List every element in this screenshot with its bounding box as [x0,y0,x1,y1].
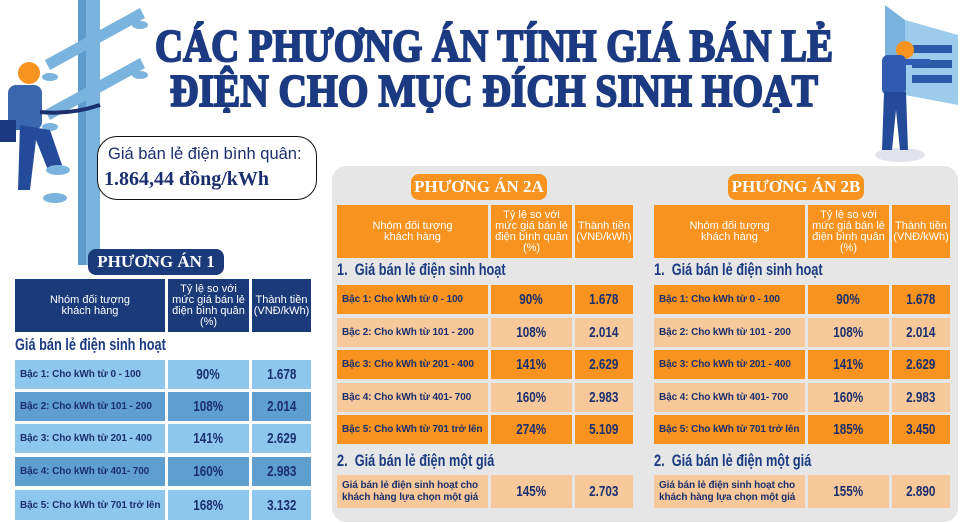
table header [15,279,311,332]
table rows: Bậc 1: Cho kWh từ 0 - 100 [659,294,780,305]
heading: phuong an 2B [728,174,864,200]
table rows: 141% [194,430,223,447]
table header: khách hàng [384,230,441,242]
section label: Giá bán lẻ điện sinh hoạt [15,335,166,354]
table rows [15,360,311,520]
single price row: 2.703 [589,483,619,500]
table header: Tỷ lệ so với mức giá bán lẻ điện bình quân (%) [172,282,245,328]
table header: Thành tiền (VNĐ/kWh) [254,294,309,316]
table rows: Bậc 1: Cho kWh từ 0 - 100 [20,369,141,380]
table rows: 90% [520,291,543,308]
table rows: 141% [517,356,546,373]
heading: phuong an 1 [88,249,224,275]
heading: phuong an 2A: PHƯƠNG ÁN 2A [414,177,544,196]
panel: phuong an 2A [337,174,633,508]
table rows: 90% [837,291,860,308]
table rows: 2.983 [267,463,296,480]
title [155,20,833,113]
panel: phuong an 1 [15,249,311,520]
panel: phuong an 2B [654,174,950,508]
single price row: Giá bán lẻ điện sinh hoạt cho [659,480,795,490]
table rows: 168% [194,496,223,514]
table rows: Bậc 4: Cho kWh từ 401- 700 [20,466,149,477]
table rows: 185% [834,421,863,438]
callout: average price: 1.864,44 đồng/kWh [104,168,269,190]
table rows: Bậc 4: Cho kWh từ 401- 700 [342,392,471,403]
section label 1: 1. Giá bán lẻ điện sinh hoạt [654,260,823,279]
illustration: worker at electrical panel [875,5,958,162]
single price row [337,475,633,508]
table rows: Bậc 5: Cho kWh từ 701 trở lên [342,424,482,435]
table rows: 274% [517,421,546,438]
table rows: 141% [834,356,863,373]
table rows: Bậc 3: Cho kWh từ 201 - 400 [20,433,152,444]
table header [654,205,950,258]
table rows: 2.983 [906,389,936,406]
table header: Nhóm đối tượng [372,220,452,232]
heading: phuong an 2B: PHƯƠNG ÁN 2B [732,177,860,196]
table rows: Bậc 1: Cho kWh từ 0 - 100 [342,294,463,305]
table header: Thành tiền (VNĐ/kWh) [576,220,632,242]
table rows: 2.014 [267,398,296,415]
table rows: Bậc 4: Cho kWh từ 401- 700 [659,392,788,403]
table rows: Bậc 2: Cho kWh từ 101 - 200 [659,327,791,338]
illustration: power pole with worker [0,0,148,265]
table rows: 1.678 [267,366,296,383]
panel: gray background for 2A and 2B [332,166,958,522]
single price row [654,475,950,508]
table rows: Bậc 5: Cho kWh từ 701 trở lên [659,424,799,435]
table rows: Bậc 5: Cho kWh từ 701 trở lên [20,500,160,510]
table header: khách hàng [62,304,118,316]
table header: khách hàng [701,230,758,242]
table rows: Bậc 3: Cho kWh từ 201 - 400 [342,359,474,370]
table rows: 90% [197,366,220,383]
table header: Thành tiền (VNĐ/kWh) [893,220,949,242]
table rows [337,285,633,444]
single price row: 155% [834,483,863,500]
table header: Tỷ lệ so với mức giá bán lẻ điện bình quân (%) [812,208,885,254]
heading: phuong an 2A [411,174,547,200]
table rows: Bậc 3: Cho kWh từ 201 - 400 [659,359,791,370]
table header: Nhóm đối tượng [50,294,130,306]
table rows: 2.014 [906,324,936,341]
callout: average price [97,136,317,200]
table rows: 108% [194,398,223,415]
table rows: 2.629 [906,356,936,373]
table rows: Bậc 2: Cho kWh từ 101 - 200 [20,401,152,412]
single price row: khách hàng lựa chọn một giá [659,492,795,502]
table rows: 108% [517,324,546,341]
table rows: 1.678 [589,291,619,308]
heading: phuong an 1: PHƯƠNG ÁN 1 [97,252,215,271]
table rows [654,285,950,444]
table rows: 2.983 [589,389,619,406]
single price row: 145% [517,483,546,500]
section label 2: 2. Giá bán lẻ điện một giá [337,451,494,470]
single price row: khách hàng lựa chọn một giá [342,492,478,502]
table header: Tỷ lệ so với mức giá bán lẻ điện bình quân (%) [495,208,568,254]
table rows: 2.014 [589,324,619,341]
table rows: 2.629 [267,430,296,447]
table rows: 3.450 [906,421,936,438]
table header: Nhóm đối tượng [689,220,770,232]
section label 1: 1. Giá bán lẻ điện sinh hoạt [337,260,506,279]
table rows: 3.132 [267,496,296,514]
table rows: 160% [834,389,863,406]
section label 2: 2. Giá bán lẻ điện một giá [654,451,811,470]
table rows: 160% [517,389,546,406]
table rows: 1.678 [906,291,936,308]
table rows: 2.629 [589,356,619,373]
table rows: Bậc 2: Cho kWh từ 101 - 200 [342,327,474,338]
table rows: 108% [834,324,863,341]
table rows: 5.109 [589,421,619,438]
callout: average price: Giá bán lẻ điện bình quân: [108,145,302,163]
table rows: 160% [194,463,223,480]
table header [337,205,633,258]
single price row: 2.890 [906,483,936,500]
single price row: Giá bán lẻ điện sinh hoạt cho [342,480,478,490]
